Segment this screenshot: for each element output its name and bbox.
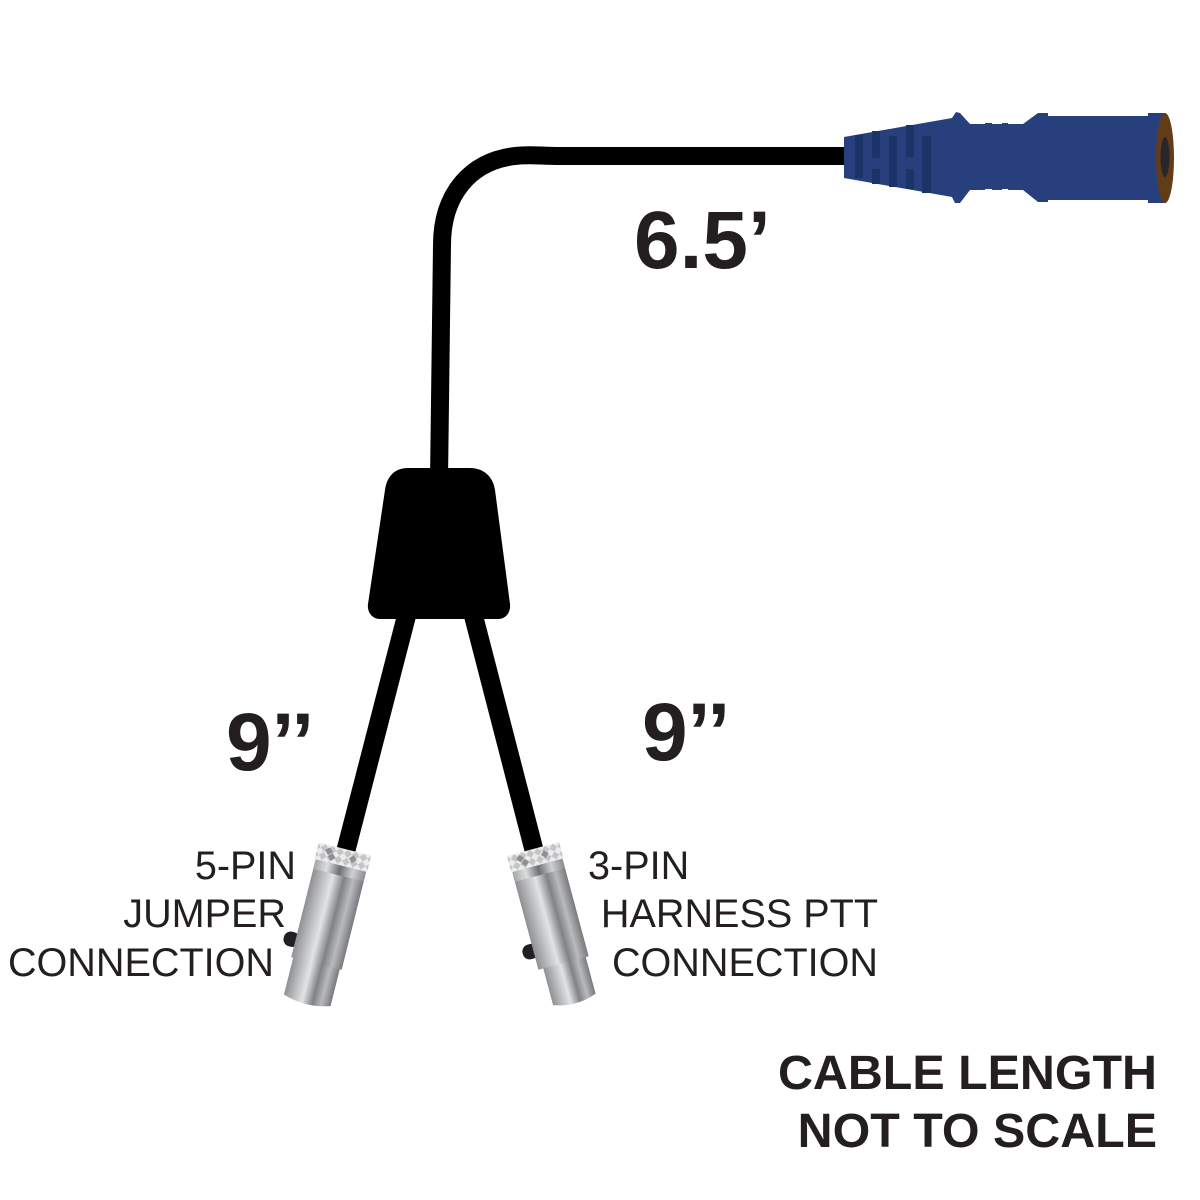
length label: right 9 inch: 9’’ <box>642 687 730 778</box>
left metal connector <box>269 840 371 1011</box>
label: 5-pin jumper connection <box>8 844 296 985</box>
connector opening <box>1156 113 1174 203</box>
lock pin <box>521 942 540 961</box>
blue connector <box>844 112 1174 203</box>
label: 5-pin jumper connection: JUMPER <box>123 892 286 936</box>
label: 5-pin jumper connection: 5-PIN <box>195 844 296 888</box>
note: cable length not to scale: CABLE LENGTH <box>778 1046 1157 1100</box>
knurled ring <box>507 842 563 872</box>
knurled ring <box>315 842 371 872</box>
label: 3-pin harness PTT connection: CONNECTION <box>612 941 878 985</box>
Y splitter block <box>368 468 510 619</box>
note: cable length not to scale: NOT TO SCALE <box>798 1104 1157 1158</box>
label: 3-pin harness PTT connection <box>588 844 878 985</box>
main barrel <box>291 862 365 970</box>
length label: left 9 inch: 9’’ <box>226 697 314 788</box>
lock pin <box>282 930 301 948</box>
lower barrel <box>542 951 597 1009</box>
cable: left leg <box>346 610 408 850</box>
lower barrel <box>283 952 341 1010</box>
cable: right leg <box>472 610 534 850</box>
label: 5-pin jumper connection: CONNECTION <box>8 941 274 985</box>
label: 3-pin harness PTT connection: HARNESS PTT <box>601 892 878 936</box>
label: 3-pin harness PTT connection: 3-PIN <box>588 844 689 888</box>
connector bore <box>1160 137 1170 177</box>
length label: 6.5 feet: 6.5’ <box>634 195 771 286</box>
main barrel <box>513 862 589 970</box>
note: cable length not to scale <box>778 1046 1157 1158</box>
connector strain relief ribs <box>855 125 931 193</box>
cable: main line <box>439 155 850 480</box>
collar <box>313 856 367 881</box>
collar <box>512 856 565 882</box>
connector body <box>844 112 1166 203</box>
right metal connector <box>497 842 600 1013</box>
